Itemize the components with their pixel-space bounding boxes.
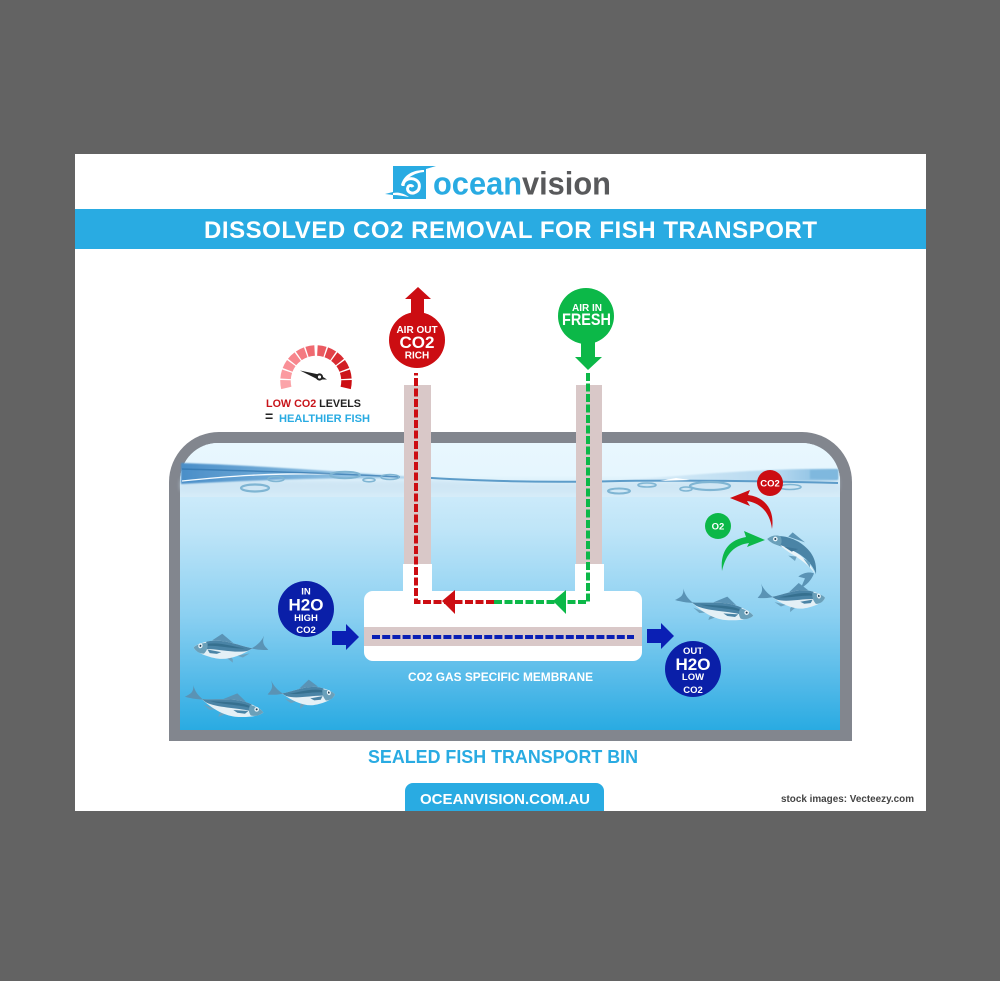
title banner — [75, 209, 926, 249]
water out badge — [665, 641, 721, 697]
arrow: red CO2 — [730, 490, 773, 529]
gauge needle — [300, 370, 327, 381]
water flow dashes — [372, 635, 634, 639]
exchange: O2 in — [705, 513, 765, 571]
membrane module — [364, 564, 642, 661]
website tab: OCEANVISION.COM.AU — [420, 791, 590, 808]
fish 5 — [754, 568, 826, 620]
exchange: O2 in: O2 — [712, 522, 724, 532]
air out badge: RICH — [405, 350, 429, 362]
gauge dial — [285, 350, 347, 388]
membrane strip — [364, 627, 642, 646]
arrow: water out — [647, 623, 674, 649]
green air flow line — [494, 373, 588, 614]
air out badge: AIR OUT — [396, 325, 438, 336]
exchange: CO2 out — [730, 470, 783, 529]
water surface — [180, 443, 840, 497]
water in badge: CO2 — [296, 625, 316, 636]
fish 4 — [675, 588, 753, 620]
gauge: low CO2 levels: HEALTHIER FISH — [279, 413, 370, 425]
panel: sealed fish transport bin — [169, 432, 852, 741]
water out badge: H2O — [676, 655, 710, 674]
image credit: stock images: Vecteezy.com — [781, 794, 914, 805]
water in badge: H2O — [289, 596, 323, 614]
fish 6: breathing fish — [767, 532, 816, 588]
water in badge: HIGH — [294, 613, 318, 624]
gauge: low CO2 levels — [265, 350, 370, 425]
water out badge: OUT — [683, 646, 703, 657]
water in badge — [278, 581, 334, 637]
water out badge: CO2 — [683, 685, 703, 696]
logo wordmark: oceanvision — [433, 166, 611, 202]
fish 3 — [264, 665, 336, 716]
water out badge: LOW — [682, 672, 704, 683]
icon: logo swirl — [385, 166, 436, 199]
exchange: CO2 out: CO2 — [760, 478, 780, 490]
gauge caption: LOW CO2 LEVELS — [266, 398, 361, 410]
title banner: DISSOLVED CO2 REMOVAL FOR FISH TRANSPORT — [204, 217, 817, 244]
membrane label: CO2 GAS SPECIFIC MEMBRANE — [408, 670, 593, 684]
fish: lower left school — [185, 619, 336, 717]
air in badge: AIR IN — [572, 303, 602, 314]
fish 1 — [192, 619, 272, 671]
pipe: air outlet — [404, 385, 431, 565]
gauge: low CO2 levels: = — [265, 408, 273, 424]
fish 2 — [185, 685, 263, 717]
pipe: air inlet — [576, 385, 602, 565]
water in badge: IN — [301, 586, 311, 598]
air out badge: CO2 — [400, 333, 434, 352]
red CO2 flow line — [416, 373, 494, 614]
air in badge — [558, 288, 614, 370]
air out badge — [389, 287, 445, 368]
logo: oceanvision — [385, 166, 611, 202]
bin label: SEALED FISH TRANSPORT BIN — [368, 747, 638, 767]
website tab — [405, 783, 604, 811]
arrow: water in — [332, 624, 359, 650]
fish: right school — [675, 532, 826, 620]
air in badge: FRESH — [562, 311, 611, 329]
arrow: green O2 — [722, 531, 765, 571]
panel: white card — [75, 154, 926, 811]
